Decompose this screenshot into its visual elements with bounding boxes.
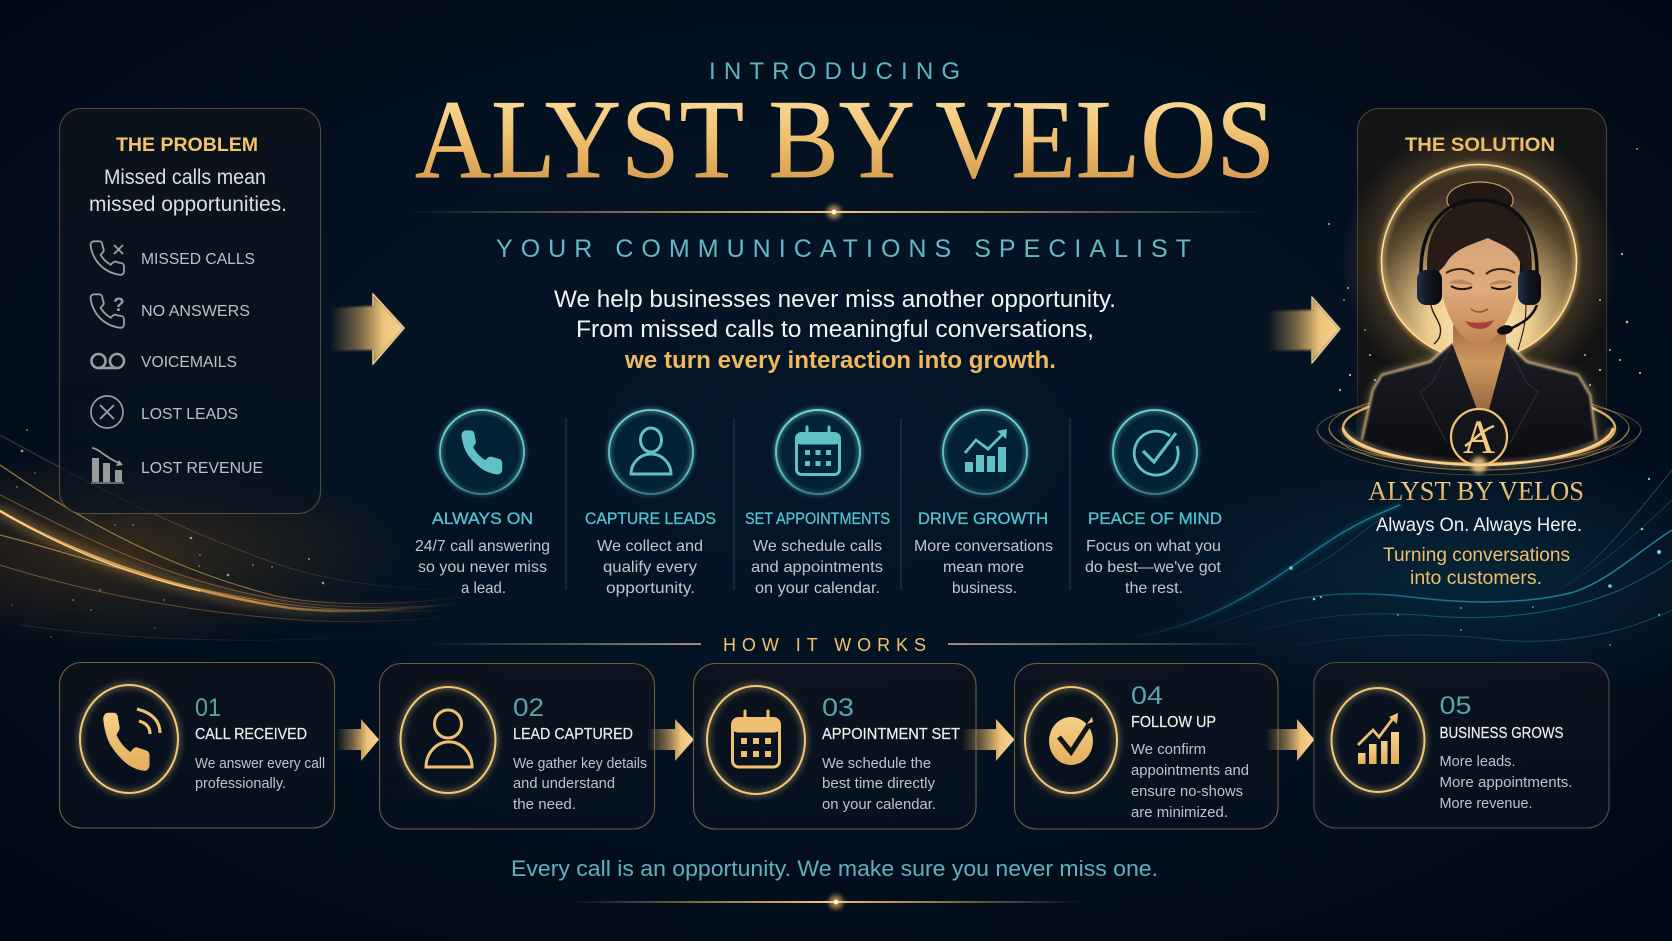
background glow: teal lower right <box>1130 450 1672 710</box>
icon: missed calls <box>91 241 124 275</box>
icon: phone <box>440 410 524 494</box>
step text: ensure no-shows <box>1131 783 1243 800</box>
feature text: Focus on what you <box>1086 538 1221 555</box>
feature text: and appointments <box>751 559 883 576</box>
feature text: qualify every <box>603 559 697 576</box>
feature title: ALWAYS ON <box>432 509 533 528</box>
step text <box>1131 741 1249 821</box>
feature text: do best—we've got <box>1085 559 1222 576</box>
step text: on your calendar. <box>822 796 936 813</box>
panel intro <box>89 166 287 216</box>
arrow: step 4 to 5 <box>1266 719 1314 761</box>
jacket <box>1362 343 1596 461</box>
hair bun <box>1447 182 1513 218</box>
background glow: gold lower left <box>0 450 420 650</box>
step title: APPOINTMENT SET <box>822 726 960 743</box>
step number: 01 <box>195 694 221 722</box>
feature: capture leads <box>585 410 716 597</box>
step icon: growth chart <box>1332 688 1424 792</box>
step text: We gather key details <box>513 755 647 772</box>
solution brand name: ALYST BY VELOS <box>1368 476 1584 506</box>
icon: voicemail <box>92 354 124 368</box>
panel intro: missed opportunities. <box>89 193 287 216</box>
heading: how it works: HOW IT WORKS <box>723 635 926 655</box>
arrow: step 1 to 2 <box>336 719 379 761</box>
step title: FOLLOW UP <box>1131 714 1216 731</box>
feature: always on <box>415 410 550 597</box>
body glow <box>1362 343 1596 440</box>
step 2: lead captured <box>380 664 654 829</box>
gold particles <box>11 429 324 638</box>
step text <box>1440 753 1572 812</box>
solution statement: into customers. <box>1410 568 1542 589</box>
feature text: We collect and <box>597 538 703 555</box>
step text: More appointments. <box>1440 774 1572 791</box>
label: lost leads: LOST LEADS <box>141 406 238 423</box>
halo <box>1341 124 1617 400</box>
step text: We schedule the <box>822 755 931 772</box>
step number: 05 <box>1440 692 1472 720</box>
step title: CALL RECEIVED <box>195 726 307 743</box>
step text: and understand <box>513 775 615 792</box>
rear rings <box>1317 392 1641 464</box>
icon: no answers: ? <box>113 295 125 316</box>
step text: the need. <box>513 796 576 813</box>
title divider <box>405 205 1265 219</box>
feature title: DRIVE GROWTH <box>918 509 1048 528</box>
portrait: agent with headset <box>1317 124 1641 475</box>
feature: set appointments <box>745 410 890 597</box>
title: ALYST BY VELOS <box>415 78 1275 202</box>
feature text <box>1085 538 1222 597</box>
feature title: PEACE OF MIND <box>1088 509 1222 528</box>
panel box <box>60 108 320 514</box>
icon: calendar <box>776 410 860 494</box>
feature text <box>415 538 550 597</box>
feature title: CAPTURE LEADS <box>585 509 716 528</box>
icon: person <box>609 410 693 494</box>
teal particles <box>1289 478 1661 646</box>
hair back <box>1427 201 1532 282</box>
front ring <box>1317 428 1641 475</box>
panel heading: THE SOLUTION <box>1405 135 1555 156</box>
label: missed calls: MISSED CALLS <box>141 251 255 268</box>
logo badge: A <box>1463 411 1495 464</box>
panel intro: Missed calls mean <box>104 166 266 189</box>
subtitle: YOUR COMMUNICATIONS SPECIALIST <box>496 235 1191 263</box>
panel heading: THE PROBLEM <box>116 135 258 156</box>
footer divider <box>569 895 1083 909</box>
step icon: check <box>1025 687 1117 793</box>
step icon: person <box>400 687 496 793</box>
step text: best time directly <box>822 775 935 792</box>
feature text: More conversations <box>914 538 1053 555</box>
feature dividers <box>566 418 1070 590</box>
step 4: follow up <box>1014 664 1278 829</box>
feature text <box>751 538 883 597</box>
icon: growth chart <box>943 410 1027 494</box>
arrow: problem to center <box>330 294 404 364</box>
solution statement <box>1383 545 1570 589</box>
step text <box>195 755 325 792</box>
step number: 02 <box>513 694 544 722</box>
step card <box>1314 662 1609 828</box>
hair front <box>1427 202 1532 276</box>
panel: the problem <box>60 108 320 514</box>
label: voicemails: VOICEMAILS <box>141 354 237 371</box>
label: no answers: NO ANSWERS <box>141 303 250 320</box>
step icon: phone ringing <box>80 685 178 793</box>
feature text <box>597 538 703 597</box>
step card <box>1014 664 1278 829</box>
step text: professionally. <box>195 775 286 792</box>
intro paragraph: From missed calls to meaningful conversations, <box>576 316 1094 343</box>
feature text: a lead. <box>461 580 506 597</box>
face <box>1439 232 1520 347</box>
step icon: calendar <box>707 686 805 794</box>
intro paragraph: We help businesses never miss another opportunity. <box>554 286 1116 313</box>
gold light swoosh <box>0 435 480 640</box>
hair strand <box>1431 305 1441 344</box>
halo particles <box>1328 148 1641 391</box>
feature text: so you never miss <box>418 559 547 576</box>
solution tagline: Always On. Always Here. <box>1376 514 1582 536</box>
step text: are minimized. <box>1131 804 1228 821</box>
icon: check circle <box>1113 410 1197 494</box>
label: lost revenue: LOST REVENUE <box>141 460 263 477</box>
feature: peace of mind <box>1085 410 1222 597</box>
feature title: SET APPOINTMENTS <box>745 509 890 528</box>
step card <box>694 664 976 829</box>
step number: 04 <box>1131 682 1163 710</box>
headset <box>1417 200 1541 350</box>
step text <box>822 755 936 813</box>
feature text: mean more <box>943 559 1024 576</box>
step text: appointments and <box>1131 762 1249 779</box>
icon: lost leads <box>91 396 123 428</box>
feature text: the rest. <box>1125 580 1183 597</box>
step 3: appointment set <box>694 664 976 829</box>
icon: no answers <box>91 294 125 328</box>
kicker: introducing: INTRODUCING <box>709 58 960 85</box>
panel: the solution <box>1317 108 1641 589</box>
neck and chest <box>1440 325 1522 432</box>
panel box <box>1358 108 1606 478</box>
step text: We confirm <box>1131 741 1206 758</box>
step card <box>380 664 654 829</box>
feature text: opportunity. <box>606 580 695 597</box>
step text: More leads. <box>1440 753 1516 770</box>
step number: 03 <box>822 694 854 722</box>
footer tagline: Every call is an opportunity. We make sure you never miss one. <box>511 856 1158 881</box>
step 1: call received <box>60 662 334 828</box>
solution statement: Turning conversations <box>1383 545 1570 566</box>
step text <box>513 755 647 813</box>
feature text: business. <box>952 580 1017 597</box>
intro paragraph <box>554 286 1116 374</box>
step text: We answer every call <box>195 755 325 772</box>
arrow: step 2 to 3 <box>647 719 694 761</box>
ring flare <box>1471 457 1487 473</box>
icon: lost revenue <box>91 448 124 483</box>
feature text: We schedule calls <box>753 538 882 555</box>
arrow: step 3 to 4 <box>962 719 1014 761</box>
feature text: on your calendar. <box>755 580 880 597</box>
feature text: 24/7 call answering <box>415 538 550 555</box>
step text: More revenue. <box>1440 795 1532 812</box>
step 5: business grows <box>1314 662 1609 828</box>
step title: LEAD CAPTURED <box>513 726 633 743</box>
logo badge <box>1451 409 1507 465</box>
step title: BUSINESS GROWS <box>1440 725 1564 742</box>
feature: drive growth <box>914 410 1053 597</box>
arrow: center to solution <box>1268 297 1340 363</box>
step card <box>60 662 334 828</box>
teal light swoosh <box>1130 470 1672 655</box>
feature text <box>914 538 1053 597</box>
intro paragraph: we turn every interaction into growth. <box>624 347 1056 374</box>
